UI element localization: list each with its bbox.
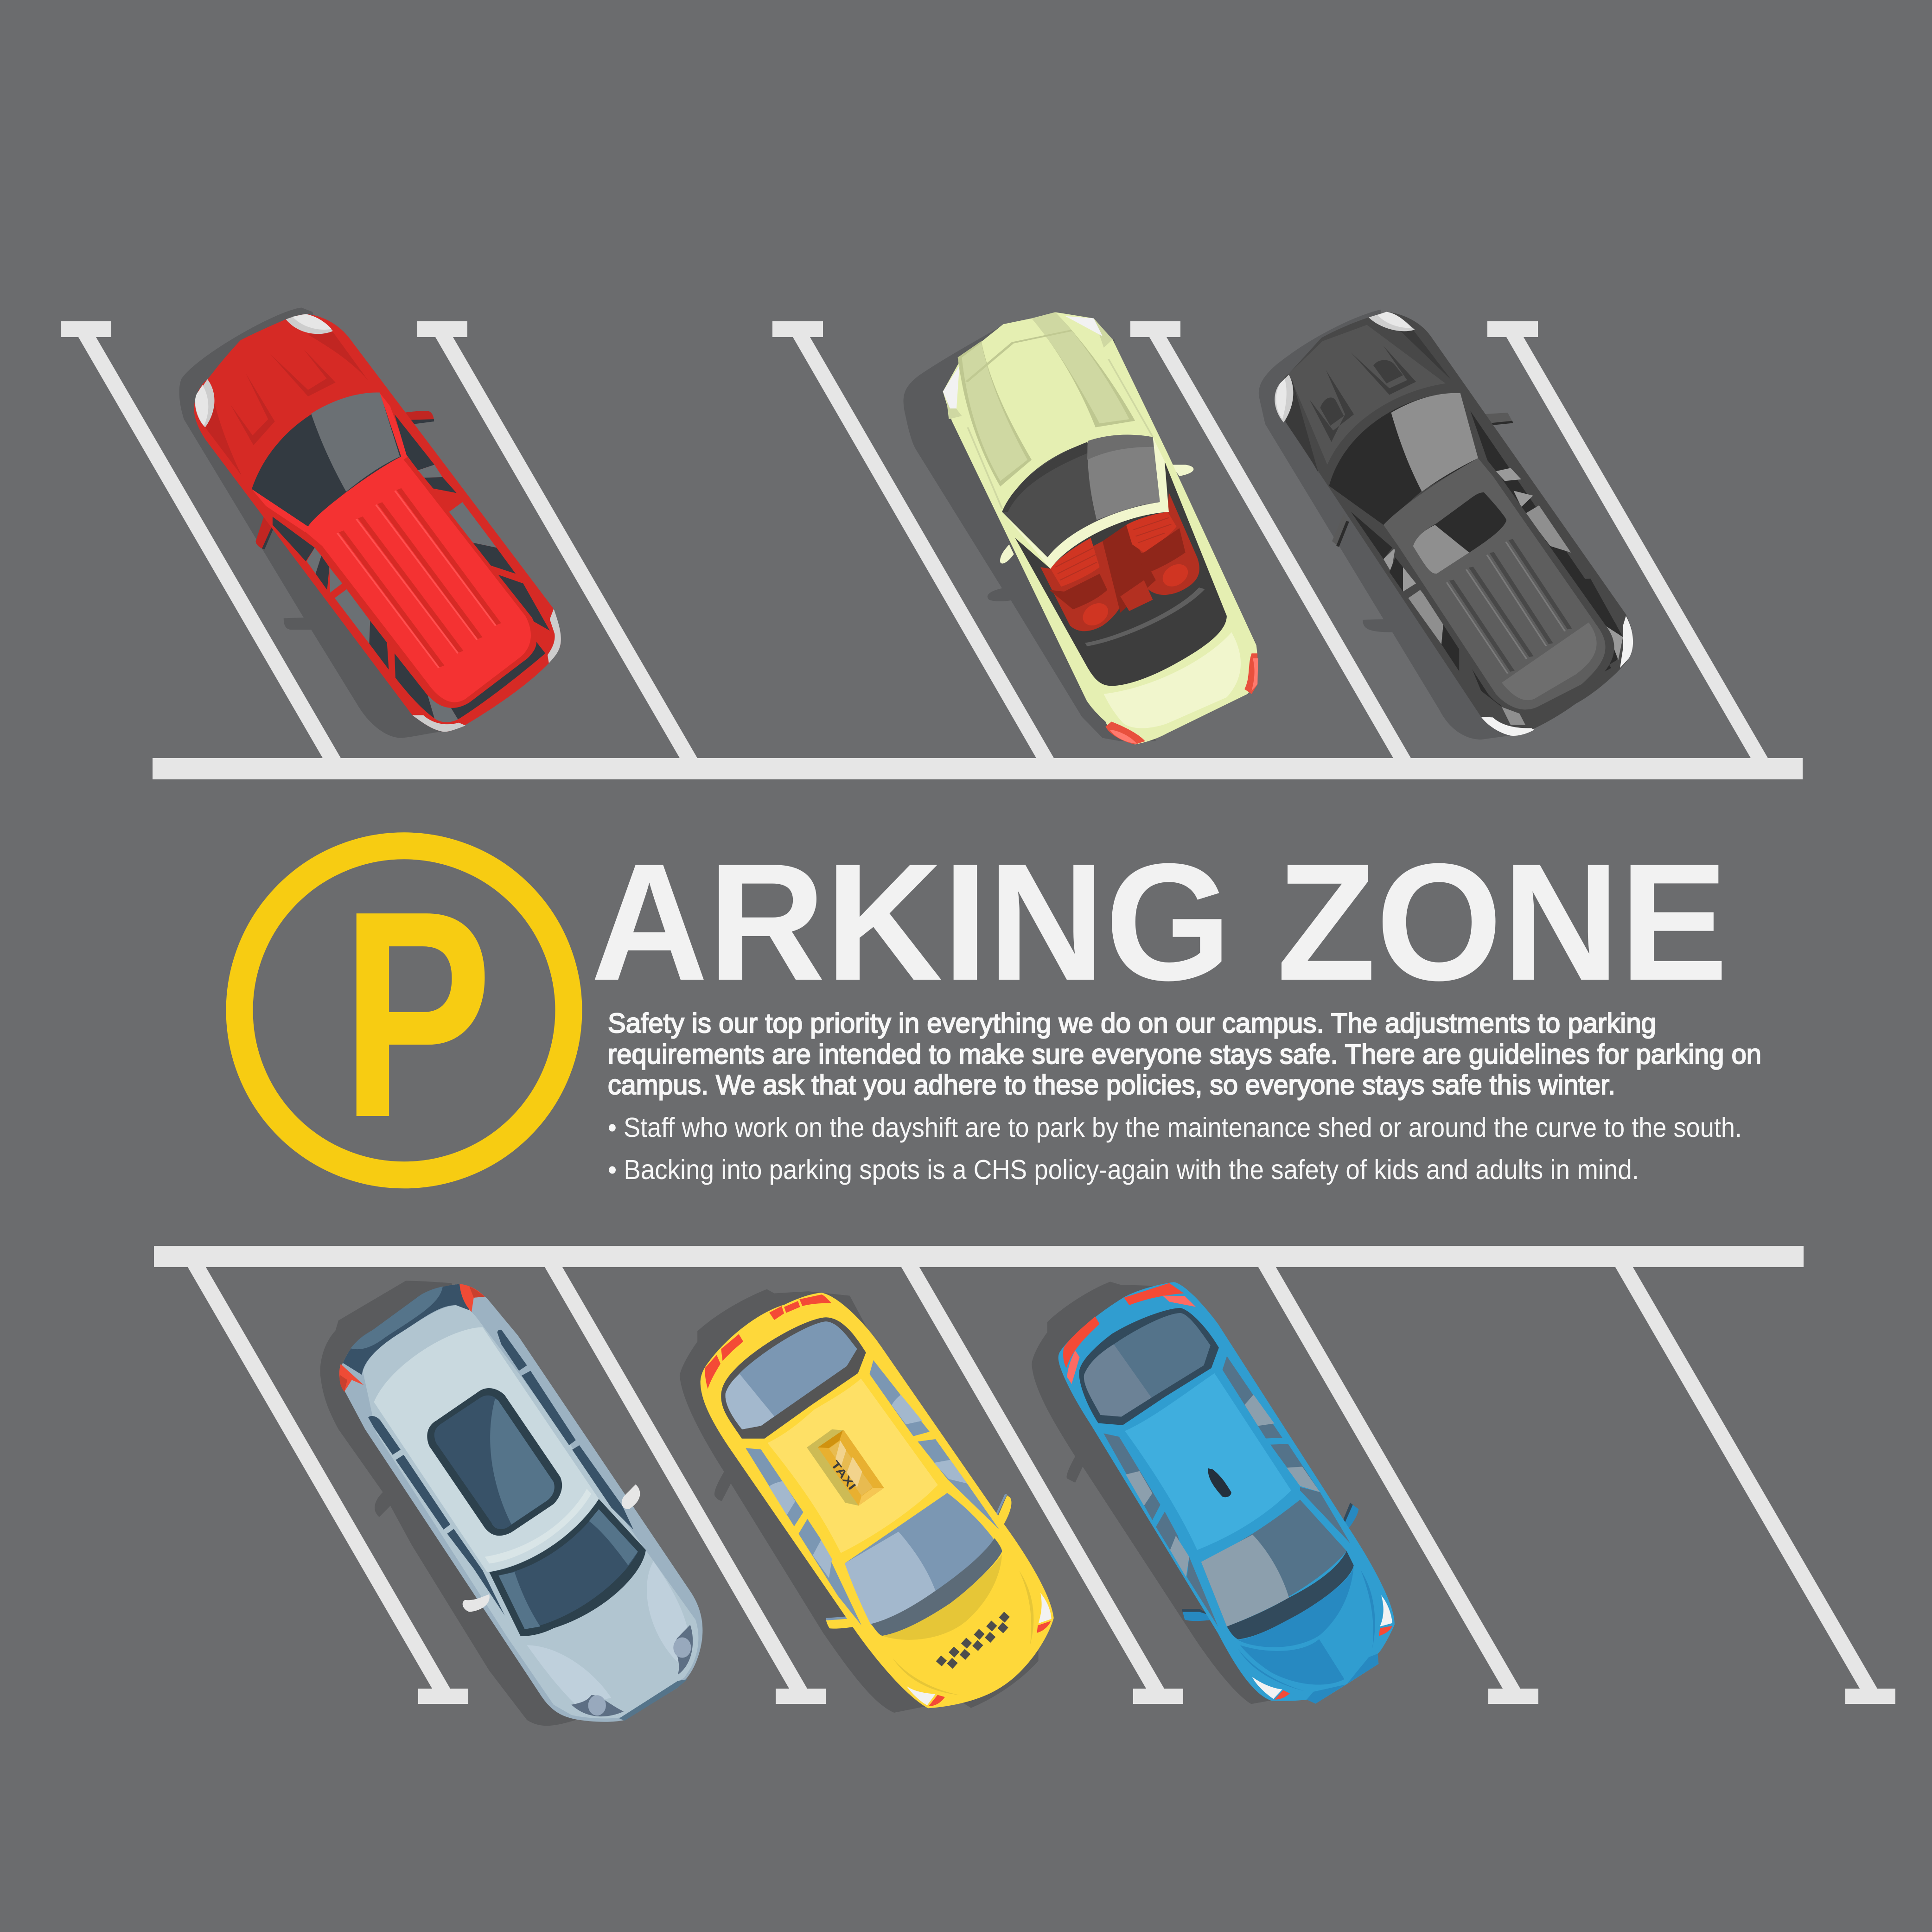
silver car shadow — [320, 1281, 576, 1726]
bullet list — [608, 1112, 1742, 1185]
bottom parking row lines — [154, 1246, 1895, 1704]
bullet list: • Staff who work on the dayshift are to park by the maintenance shed or around the curve to the south. — [608, 1112, 1742, 1143]
taxi checker stripe — [936, 1612, 1010, 1669]
convertible mirrors — [1000, 465, 1193, 563]
parking sign: P in a yellow circle — [239, 846, 568, 1179]
red car side windows — [273, 414, 550, 722]
taxi rear window — [721, 1317, 866, 1439]
title: ARKING ZONE — [591, 829, 1728, 1015]
blue car body — [1058, 1282, 1395, 1704]
black car body — [1276, 312, 1633, 734]
convertible headlights — [943, 316, 1103, 408]
parking sign: P in a yellow circle: P — [341, 850, 492, 1179]
bullet list: • Backing into parking spots is a CHS policy-again with the safety of kids and adults in mind. — [608, 1154, 1639, 1185]
taxi roof — [767, 1378, 938, 1553]
car: silver sedan, bottom row — [320, 1281, 702, 1726]
red car body — [194, 314, 561, 732]
blue car windshield — [1201, 1500, 1354, 1639]
taxi shadow — [680, 1289, 1039, 1713]
silver car roof — [374, 1327, 599, 1572]
silver car rear glass — [343, 1284, 469, 1375]
black car rear lights — [1481, 616, 1633, 736]
red car windshield — [252, 392, 415, 532]
taxi side windows — [746, 1360, 999, 1626]
red car shadow — [179, 307, 446, 738]
blue car hood — [1238, 1567, 1378, 1704]
convertible interior — [1015, 461, 1227, 686]
silver car headlights — [571, 1625, 693, 1721]
convertible rear lights — [1105, 653, 1258, 745]
intro paragraph: requirements are intended to make sure everyone stays safe. There are guidelines for parking on — [608, 1039, 1761, 1070]
black car headlights — [1275, 312, 1415, 422]
taxi roof sign: TAXI — [828, 1459, 858, 1492]
car: red pickup, top row — [179, 307, 561, 738]
red car headlights — [195, 314, 333, 427]
black car shadow — [1259, 310, 1517, 740]
taxi mirrors — [826, 1494, 1011, 1629]
blue car tail lights — [1063, 1283, 1196, 1384]
red car hood creases — [205, 332, 368, 475]
black car mirrors — [1332, 413, 1513, 547]
black car side windows — [1351, 411, 1623, 725]
car: black SUV, top row — [1259, 310, 1633, 740]
red car mirrors — [256, 411, 434, 549]
blue car sunroof vent — [1208, 1468, 1231, 1497]
taxi hood shading — [882, 1555, 1033, 1695]
convertible hood panels — [946, 312, 1153, 509]
silver car body — [340, 1284, 702, 1722]
blue car rear window — [1079, 1308, 1219, 1425]
silver car windshield — [489, 1499, 646, 1636]
taxi roof sign — [807, 1429, 884, 1505]
intro paragraph — [608, 1008, 1761, 1100]
intro paragraph: campus. We ask that you adhere to these policies, so everyone stays safe this winter. — [608, 1070, 1615, 1100]
car: yellow taxi, bottom row — [680, 1289, 1054, 1713]
blue car mirrors — [1182, 1503, 1358, 1621]
blue car shadow — [1032, 1282, 1275, 1704]
silver car mirrors — [463, 1485, 640, 1612]
top parking row lines — [61, 321, 1803, 779]
taxi body — [701, 1293, 1054, 1708]
car: blue hatchback, bottom row — [1032, 1282, 1395, 1704]
silver car sunroof — [427, 1388, 562, 1536]
red car rear lights — [412, 609, 561, 732]
taxi windshield — [845, 1493, 1002, 1636]
convertible rear deck — [1104, 632, 1241, 728]
black car roof — [1384, 458, 1614, 713]
intro paragraph: Safety is our top priority in everything we do on our campus. The adjustments to parking — [608, 1008, 1656, 1039]
blue car side windows — [1103, 1356, 1350, 1626]
blue car headlights — [1252, 1595, 1392, 1700]
red car roof — [305, 457, 537, 708]
convertible body — [943, 312, 1257, 745]
convertible windshield — [1002, 435, 1169, 569]
blue car roof — [1125, 1373, 1291, 1550]
convertible shadow — [904, 324, 1156, 741]
black car hood — [1286, 323, 1452, 473]
car: cream convertible, top row — [904, 312, 1258, 745]
silver car tail lights — [339, 1284, 485, 1392]
silver car side windows — [368, 1330, 633, 1616]
silver car hood highlights — [527, 1561, 689, 1705]
taxi tail lights — [705, 1294, 831, 1389]
black car windshield — [1329, 393, 1478, 525]
taxi headlights — [906, 1593, 1052, 1706]
